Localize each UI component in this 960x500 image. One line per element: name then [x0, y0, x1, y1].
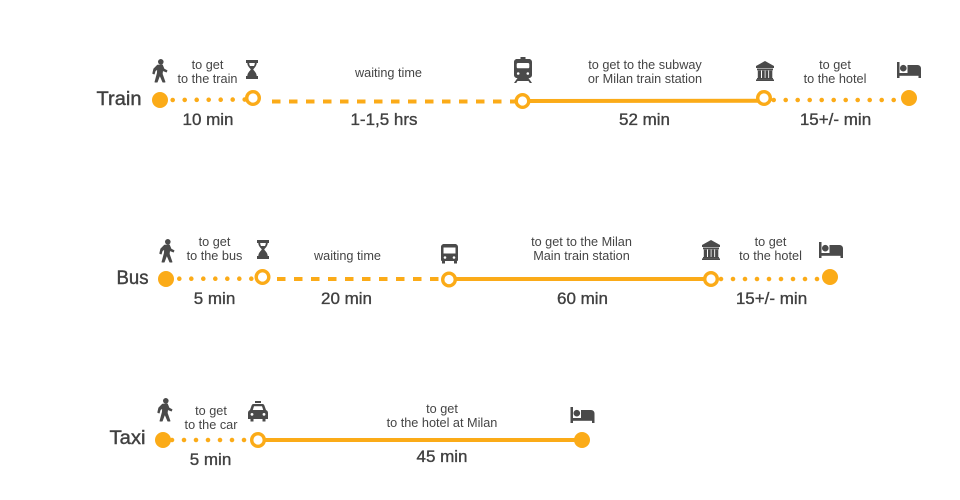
icon: bus: [441, 244, 458, 264]
start marker: [158, 271, 174, 287]
icon: bed: [570, 407, 594, 423]
dotted line: walk to the car: [172, 438, 250, 442]
dotted line: to the hotel: [721, 277, 820, 281]
label: to the hotel: to get: [755, 235, 786, 249]
label: waiting time: waiting time: [313, 249, 381, 263]
label: to the bus: to the bus: [187, 249, 242, 263]
row: Train: [96, 57, 921, 129]
icon: hourglass: [257, 240, 269, 259]
label: to the hotel: to the hotel: [804, 72, 866, 86]
duration: 45 min: 45 min: [416, 447, 468, 466]
label: to the train: to the train: [178, 72, 237, 86]
dotted line: walk to the bus: [179, 276, 256, 281]
label: to the hotel at Milan: to get: [426, 402, 458, 416]
row: Taxi: [110, 398, 594, 469]
duration: 52 min: 52 min: [619, 110, 670, 129]
duration: 10 min: 10 min: [182, 110, 234, 129]
icon: museum: [702, 240, 720, 260]
heading: Bus: Bus: [116, 268, 148, 289]
end marker: [822, 269, 838, 285]
end marker: [901, 90, 917, 106]
label: to the bus: to get: [199, 235, 230, 249]
label: to the Milan Main train station: Main train station: [533, 249, 630, 263]
stop marker: taxi: [252, 434, 264, 446]
dotted line: to the hotel: [774, 98, 898, 102]
end marker: [574, 432, 590, 448]
heading: Taxi: Taxi: [110, 428, 146, 449]
duration: 5 min: 5 min: [190, 450, 231, 469]
icon: walker: [158, 398, 172, 421]
label: to the Milan Main train station: to get to the Milan: [531, 235, 632, 249]
duration: 1-1,5 hrs: 1-1,5 hrs: [350, 110, 418, 129]
stop marker: train stop: [247, 92, 259, 104]
duration: 20 min: 20 min: [321, 289, 372, 308]
label: to the car: to the car: [185, 418, 238, 432]
start marker: [155, 432, 171, 448]
label: waiting time: waiting time: [354, 66, 422, 80]
solid line: bus ride: [449, 277, 711, 281]
label: to the subway: or Milan train station: [588, 72, 702, 86]
stop marker: bus departure: [443, 273, 455, 286]
label: to the hotel: to get: [819, 58, 851, 72]
icon: museum: [756, 61, 774, 81]
solid line: taxi ride: [258, 438, 582, 442]
duration: 60 min: 60 min: [557, 289, 608, 308]
icon: taxi: [248, 401, 268, 422]
start marker: [152, 92, 168, 108]
duration: 15+/- min: 15+/- min: [736, 289, 807, 308]
label: to the train: to get: [192, 58, 223, 72]
icon: train: [514, 57, 532, 83]
duration: 15+/- min: 15+/- min: [800, 110, 871, 129]
label: to the hotel at Milan: to the hotel at Milan: [387, 416, 497, 430]
dashed line: waiting time: [272, 100, 522, 104]
row: Bus: [116, 235, 843, 308]
heading: Train: Train: [96, 89, 142, 110]
icon: walker: [160, 239, 174, 262]
label: to the car: to get: [195, 404, 227, 418]
stop marker: subway station: [758, 92, 770, 104]
icon: walker: [153, 59, 167, 82]
stop marker: train departure: [516, 95, 529, 107]
solid line: train ride: [522, 99, 764, 103]
icon: hourglass: [246, 60, 258, 79]
icon: bed: [819, 242, 843, 258]
stop marker: bus stop: [256, 271, 269, 283]
label: to the hotel: to the hotel: [739, 249, 802, 263]
stop marker: train station: [705, 273, 717, 285]
icon: bed: [897, 62, 921, 78]
dotted line: walk to the train: [173, 97, 250, 102]
duration: 5 min: 5 min: [194, 289, 235, 308]
dashed line: waiting time: [277, 277, 449, 281]
label: to the subway: to get to the subway: [588, 58, 702, 72]
